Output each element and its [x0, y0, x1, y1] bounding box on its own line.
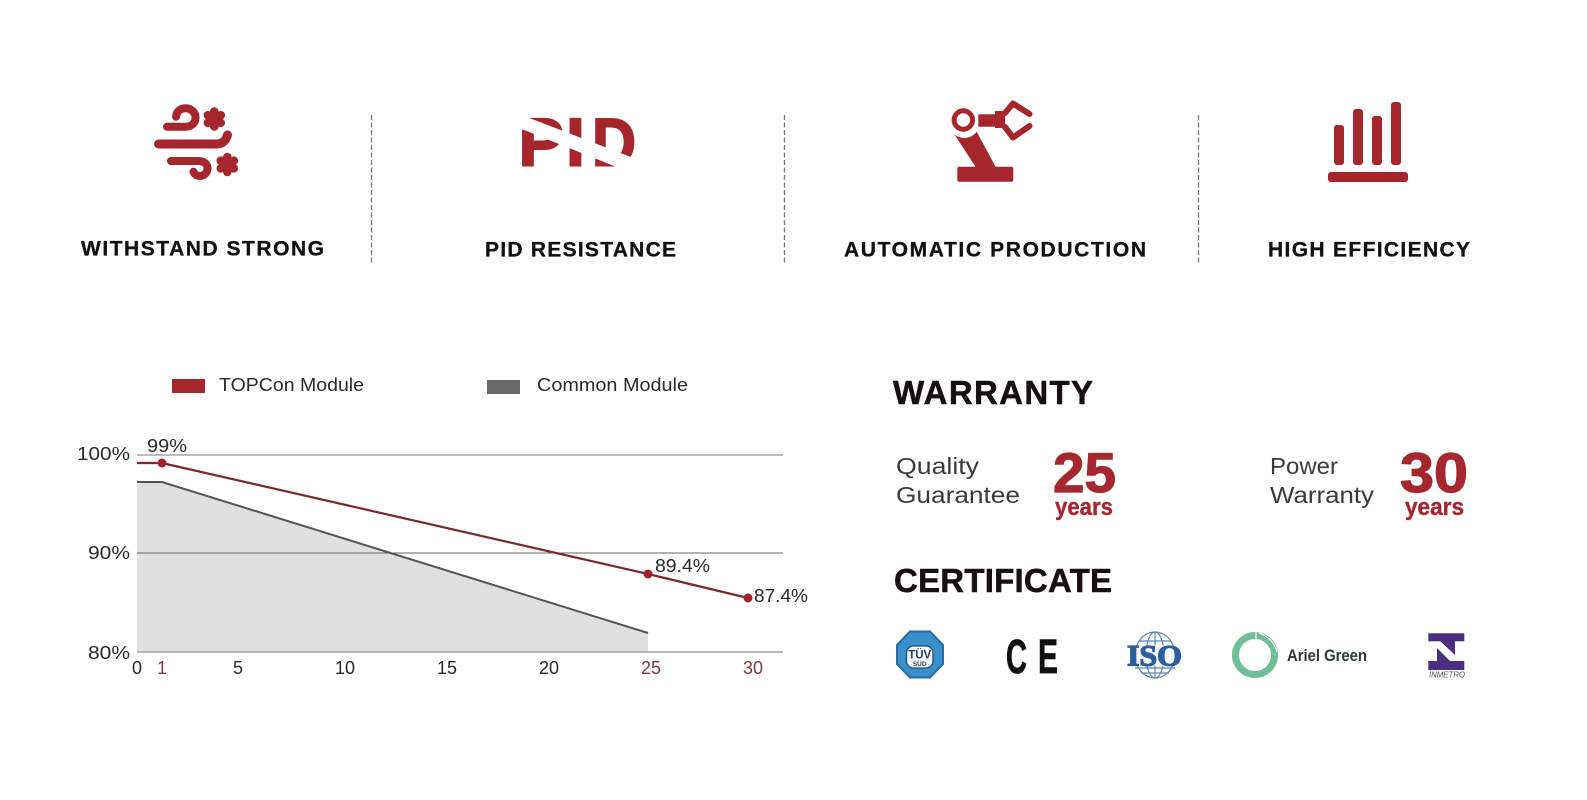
25 years: years [1055, 494, 1113, 521]
icon: PID slashed: P [518, 104, 564, 180]
logo: Ariel Green [1236, 631, 1367, 674]
icon: bars [1328, 102, 1408, 182]
heading: PID resistance: PID RESISTANCE [485, 238, 676, 262]
panel: feature high efficiency [1268, 102, 1470, 262]
logo: Ariel Green: Ariel Green [1287, 647, 1367, 665]
panel: feature withstand strong [81, 107, 324, 260]
quality guarantee label [896, 453, 1020, 508]
line: common module [137, 482, 648, 633]
logo: CE: E [1038, 631, 1058, 684]
30 years: years [1405, 494, 1464, 521]
legend: Common [487, 375, 688, 395]
logo: INMETRO: INMETRO [1429, 670, 1465, 680]
x axis labels: 1 [157, 658, 167, 678]
y axis labels: 100% [77, 444, 130, 464]
icon: PID slashed [515, 104, 640, 180]
x axis labels: 20 [539, 658, 559, 678]
logo: ISO: ISO [1127, 640, 1182, 672]
logo: ISO [1127, 632, 1182, 678]
logo: TUV: SÜD [913, 659, 927, 668]
logo: CE: C [1006, 631, 1027, 684]
value labels [147, 436, 808, 606]
x axis labels: 30 [743, 658, 763, 678]
panel: feature PID resistance [485, 104, 676, 262]
30 years: 30 [1400, 441, 1468, 504]
legend: Common: Common Module [537, 375, 688, 395]
heading: warranty: WARRANTY [893, 374, 1093, 411]
legend: TOPCon [172, 375, 364, 395]
panel: feature automatic production [844, 104, 1146, 262]
x axis labels [132, 658, 763, 678]
icon: PID slashed: I [566, 104, 585, 180]
value labels: 87.4% [754, 586, 808, 606]
heading: automatic production: AUTOMATIC PRODUCTION [844, 238, 1146, 262]
power warranty label: Power [1270, 453, 1338, 479]
value labels: 99% [147, 436, 187, 456]
x axis labels: 25 [641, 658, 661, 678]
power warranty label: Warranty [1270, 482, 1375, 508]
logo: TUV [897, 632, 943, 678]
x axis labels: 0 [132, 658, 142, 678]
quality guarantee label: Quality [896, 453, 980, 479]
x axis labels: 10 [335, 658, 355, 678]
heading: high efficiency: HIGH EFFICIENCY [1268, 238, 1470, 262]
area: common module [137, 482, 648, 652]
legend: TOPCon: TOPCon Module [219, 375, 364, 395]
icon: wind and snow [158, 107, 238, 176]
y axis labels [77, 444, 130, 663]
panel: warranty [893, 374, 1468, 521]
quality guarantee label: Guarantee [896, 482, 1020, 508]
heading: certificate: CERTIFICATE [894, 562, 1112, 599]
icon: PID slashed: D [592, 104, 636, 180]
line: TOPCon module [137, 458, 752, 602]
y axis labels: 90% [88, 543, 130, 563]
panel: certificate [894, 562, 1465, 684]
heading: withstand strong: WITHSTAND STRONG [81, 238, 324, 260]
panel: degradation chart [77, 375, 808, 678]
icon: robot arm [954, 104, 1030, 182]
logo: CE [1006, 631, 1058, 684]
power warranty label [1270, 453, 1375, 508]
x axis labels: 5 [233, 658, 243, 678]
value labels: 89.4% [655, 556, 710, 576]
y axis labels: 80% [88, 643, 130, 663]
logo: TUV: TÜV [908, 646, 931, 662]
logo: INMETRO [1428, 633, 1465, 680]
x axis labels: 15 [437, 658, 457, 678]
25 years: 25 [1053, 441, 1116, 504]
